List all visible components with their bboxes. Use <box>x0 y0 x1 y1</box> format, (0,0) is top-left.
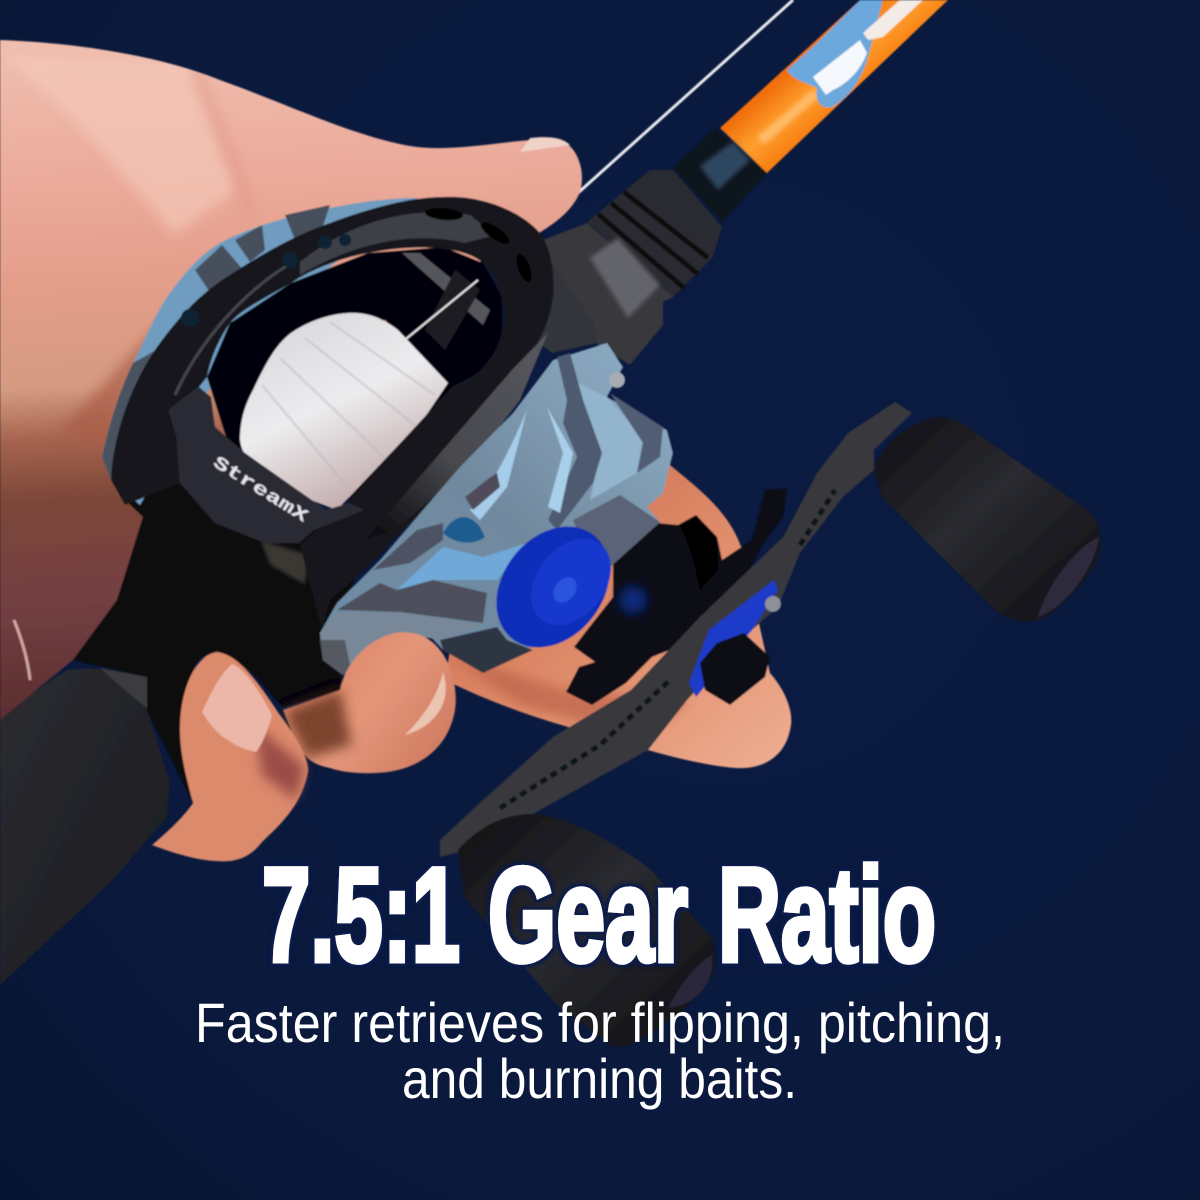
hand: fingers in front <box>152 632 456 861</box>
reel: camo gear housing <box>320 343 673 675</box>
subheading: and burning baits. <box>402 1047 797 1110</box>
reel: rear side plate camo <box>102 198 418 505</box>
subheading <box>195 991 1005 1110</box>
reel handle: blue plate and nut <box>689 580 781 705</box>
reel: second plate behind frame <box>535 263 597 353</box>
fishing line <box>530 0 793 236</box>
reel: fishing line spool <box>240 280 478 510</box>
rod ferrule and collar <box>543 128 767 365</box>
rod grip foam <box>0 668 170 985</box>
fishing rod blank <box>720 0 948 173</box>
hand: index finger behind reel <box>445 465 791 768</box>
headline: 7.5:1 <box>262 841 460 990</box>
reel: blue drag knob <box>473 504 633 670</box>
reel: black frame ring <box>111 197 554 630</box>
headline: Ratio <box>718 841 936 990</box>
hand: palm and wrist <box>0 40 582 720</box>
reel: StreamX brand bar <box>169 387 364 543</box>
headline: Gear <box>488 841 688 990</box>
reel handle: upper foam knob <box>874 417 1101 621</box>
reel handle: lower foam knob <box>458 814 715 1047</box>
reel: grey frame band <box>365 333 548 540</box>
reel: StreamX brand bar: StreamX <box>209 453 311 527</box>
reel: star drag and handle hub <box>566 488 787 705</box>
subheading: Faster retrieves for flipping, pitching, <box>195 991 1005 1054</box>
dark shadow area and reel base <box>73 480 360 803</box>
headline <box>262 841 936 990</box>
reel handle: carbon arm <box>440 402 912 857</box>
reel: spool cavity <box>207 247 502 500</box>
